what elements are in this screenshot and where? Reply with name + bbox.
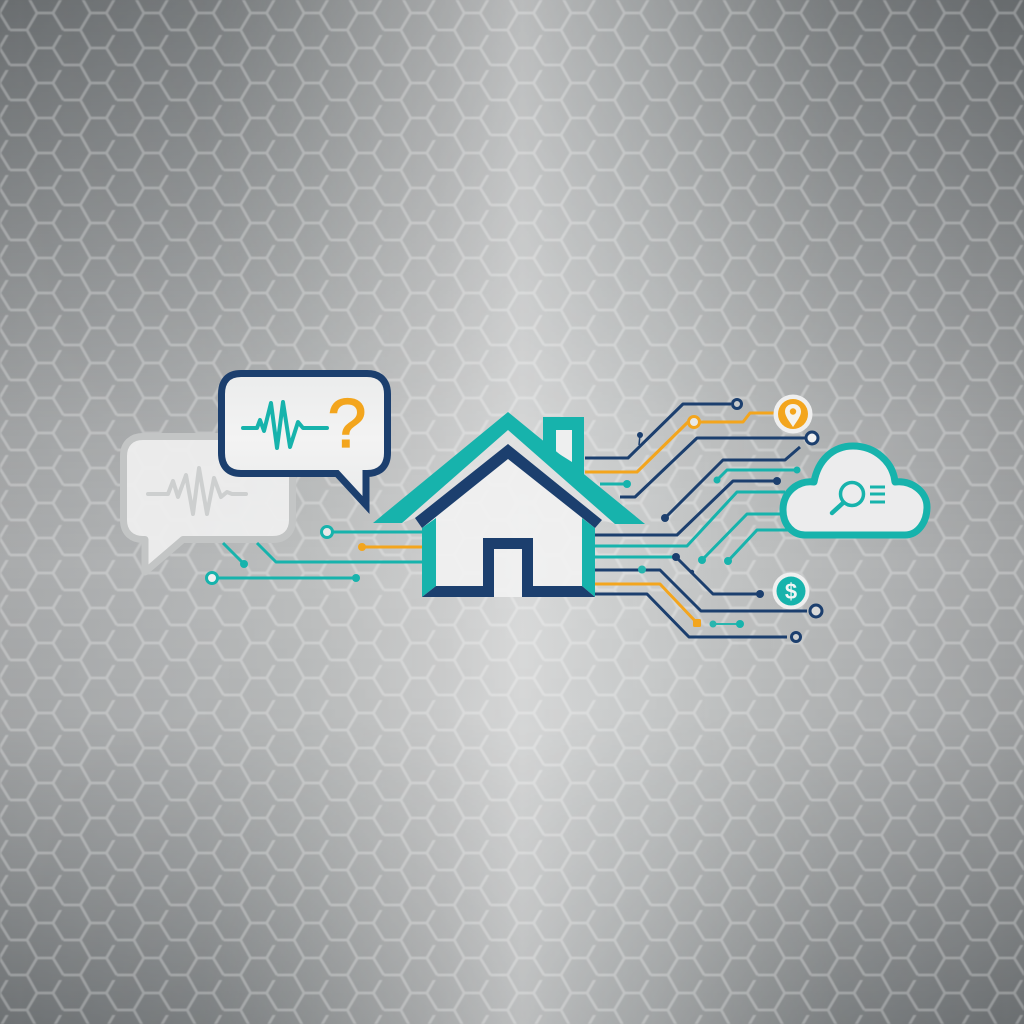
dollar badge — [772, 572, 810, 610]
chimney — [543, 417, 584, 475]
grey waveform — [148, 468, 246, 514]
house — [373, 412, 645, 597]
teal roof — [373, 412, 645, 524]
teal waveform — [243, 402, 327, 448]
navy speech bubble — [222, 374, 388, 505]
left circuit traces — [206, 526, 424, 584]
location pin badge — [774, 394, 812, 434]
navy floor and door frame — [422, 538, 595, 597]
question mark: ? — [328, 384, 366, 462]
magnifier icon — [832, 482, 885, 513]
dollar badge: $ — [785, 579, 797, 604]
navy roof — [415, 444, 602, 528]
house body — [422, 452, 595, 597]
grey speech bubble — [124, 436, 292, 572]
right circuit traces — [585, 400, 822, 642]
roof gap — [402, 430, 615, 524]
cloud with magnifier — [783, 446, 927, 535]
teal walls — [422, 518, 595, 597]
